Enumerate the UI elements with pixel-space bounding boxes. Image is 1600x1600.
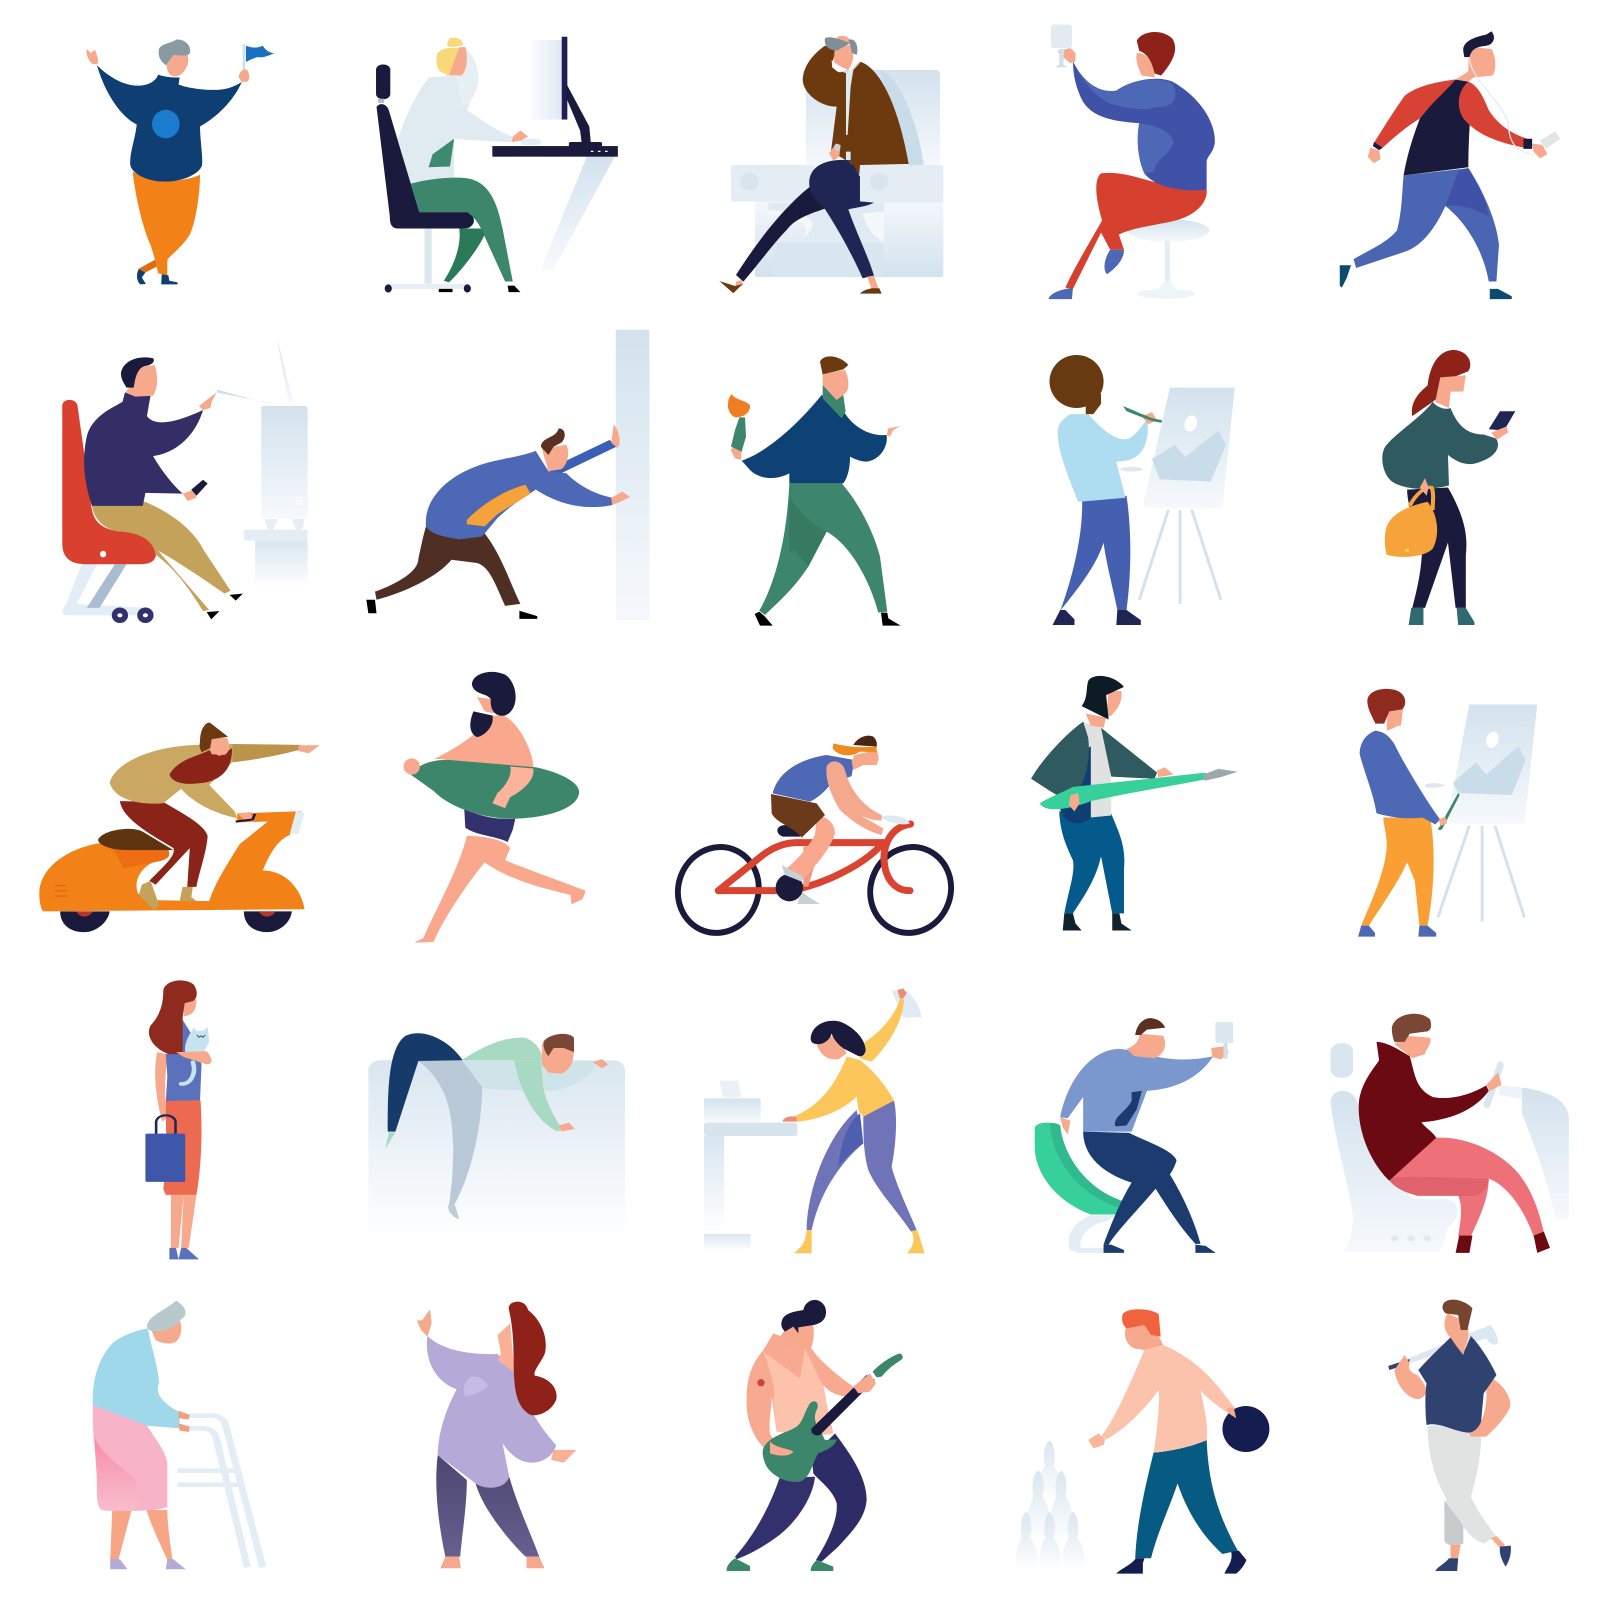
- figure: woman with cat and blue bag: [145, 980, 211, 1259]
- figure: woman with phone and yellow bag: [1382, 350, 1515, 625]
- figure: man in red chair with phone: [62, 339, 308, 623]
- bicycle wheels: [666, 836, 963, 944]
- steering wheel: [1483, 1062, 1569, 1219]
- figure: man with torch bottle: [728, 356, 901, 626]
- icon: cat: [181, 1027, 209, 1084]
- figure: woman carrying large green pen: [1031, 676, 1238, 930]
- guitar: [763, 1353, 903, 1482]
- walking frame: [178, 1416, 263, 1567]
- figure: golfer with club: [1388, 1300, 1511, 1571]
- surfboard: [411, 760, 579, 819]
- figure: man at computer desk: [376, 37, 618, 293]
- easel: [1139, 388, 1235, 604]
- blue bag: [145, 1115, 185, 1182]
- bicycle frame: [718, 824, 911, 891]
- icon: yellow bag: [1385, 487, 1437, 557]
- figure: man pushing wall: [366, 330, 649, 620]
- icon: blue flag: [246, 46, 274, 62]
- bowling ball: [1222, 1406, 1269, 1452]
- figure: woman in purple waving: [417, 1302, 577, 1568]
- bowling pins: [1016, 1441, 1084, 1572]
- icon: flame: [728, 394, 750, 417]
- figure: tired man draped over block: [368, 1033, 625, 1238]
- golf club: [1388, 1325, 1498, 1370]
- desk and monitor: [492, 37, 618, 269]
- figure: man with flag: [86, 40, 274, 284]
- figure: old woman with walker: [93, 1301, 263, 1569]
- figure: bearded painter at easel: [1049, 355, 1235, 625]
- figure: bowler with ball and pins: [1016, 1309, 1269, 1574]
- figure: boy painting at easel: [1358, 689, 1537, 937]
- figure: old man in armchair: [719, 36, 943, 294]
- figure: guitarist: [727, 1300, 903, 1571]
- desk and paper: [704, 991, 922, 1251]
- figure: woman at desk with paper: [704, 988, 925, 1253]
- wall: [616, 330, 649, 620]
- figure: cyclist on red bicycle: [666, 736, 963, 944]
- stool: [1128, 219, 1209, 299]
- red chair: [62, 400, 156, 623]
- green chair: [1035, 1123, 1127, 1253]
- wine glass: [1215, 1022, 1233, 1059]
- wine glass: [1051, 24, 1072, 67]
- figure: man in green chair with wine: [1035, 1018, 1233, 1253]
- machine and stand: [217, 339, 308, 589]
- figure: bearded surfer: [404, 672, 586, 943]
- figure: running man with earphones: [1340, 31, 1560, 299]
- office chair: [376, 64, 471, 293]
- pale block: [368, 1060, 625, 1238]
- figure: bearded man on orange scooter: [39, 723, 320, 932]
- easel: [1438, 704, 1537, 922]
- armchair: [731, 70, 943, 277]
- giant pen: [1040, 769, 1238, 809]
- scooter: [39, 811, 305, 932]
- figure: man in hoodie driving: [1331, 1014, 1569, 1253]
- figure: seated man with wine glass: [1048, 24, 1215, 299]
- car seat: [1331, 1043, 1458, 1252]
